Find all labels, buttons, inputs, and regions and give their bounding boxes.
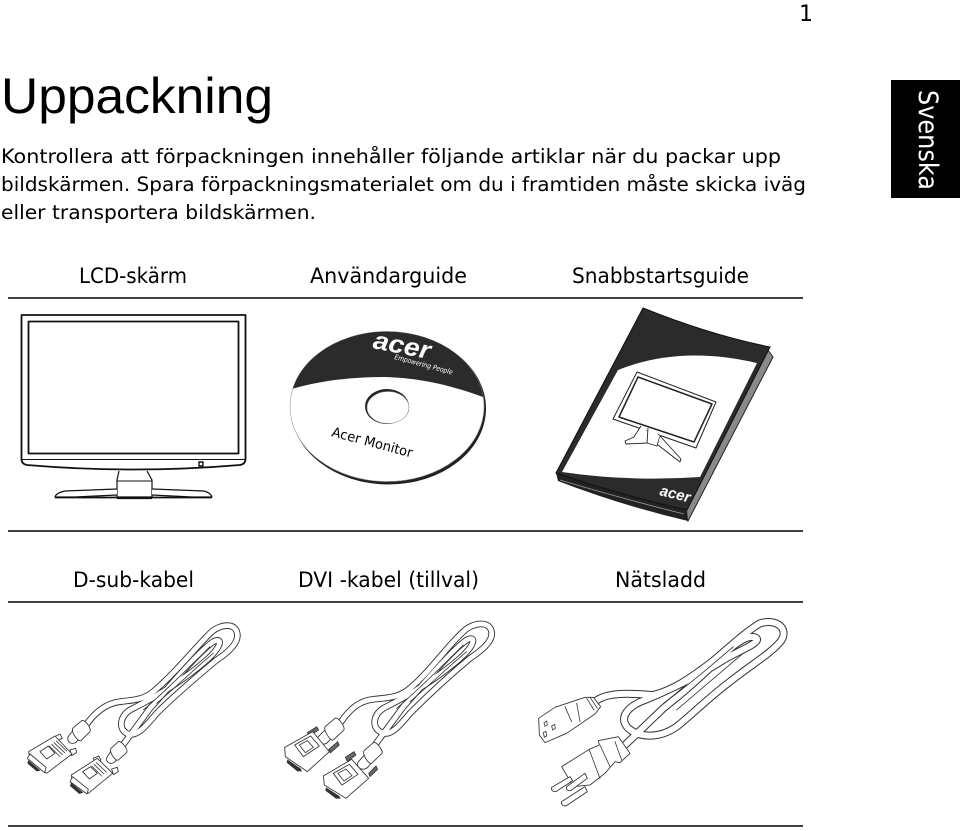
title: Uppackning	[1, 68, 273, 124]
D-sub connector 2	[70, 742, 127, 794]
illustration: power cord	[539, 622, 784, 806]
CD tagline: Empowering People	[393, 353, 454, 376]
label: Användarguide: Användarguide	[310, 264, 467, 288]
D-sub connector 1	[27, 721, 90, 773]
intro text block: bildskärmen. Spara förpackningsmaterialet om du i framtiden måste skicka iväg	[1, 173, 806, 196]
CD label: Acer Monitor	[330, 424, 415, 461]
illustration: DVI cable	[285, 624, 492, 799]
power connector	[539, 697, 601, 743]
label: Nätsladd: Nätsladd	[615, 568, 706, 592]
language tab: Svenska: Svenska	[912, 90, 943, 190]
CD logo: acer: acer	[371, 326, 435, 365]
illustration: CD-ROM disc	[290, 331, 486, 484]
intro text block: eller transportera bildskärmen.	[1, 201, 316, 224]
DVI connector 1	[285, 718, 344, 772]
page number: 1	[799, 2, 813, 27]
label: LCD-skärm: LCD-skärm	[79, 264, 187, 288]
illustration: D-sub cable	[27, 626, 237, 794]
illustration: LCD monitor	[22, 315, 246, 498]
DVI connector 2	[323, 742, 382, 799]
illustration: quick start guide booklet	[556, 308, 773, 521]
label: D-sub-kabel: D-sub-kabel	[73, 568, 194, 592]
language tab: Svenska	[891, 80, 960, 198]
intro text block	[1, 145, 806, 224]
label: Snabbstartsguide: Snabbstartsguide	[572, 264, 749, 288]
booklet logo: acer: acer	[658, 482, 693, 507]
booklet monitor drawing	[613, 372, 716, 462]
label: DVI -kabel (tillval): DVI -kabel (tillval)	[298, 568, 479, 592]
intro text block: Kontrollera att förpackningen innehåller följande artiklar när du packar upp	[1, 145, 781, 168]
power plug	[552, 737, 630, 806]
